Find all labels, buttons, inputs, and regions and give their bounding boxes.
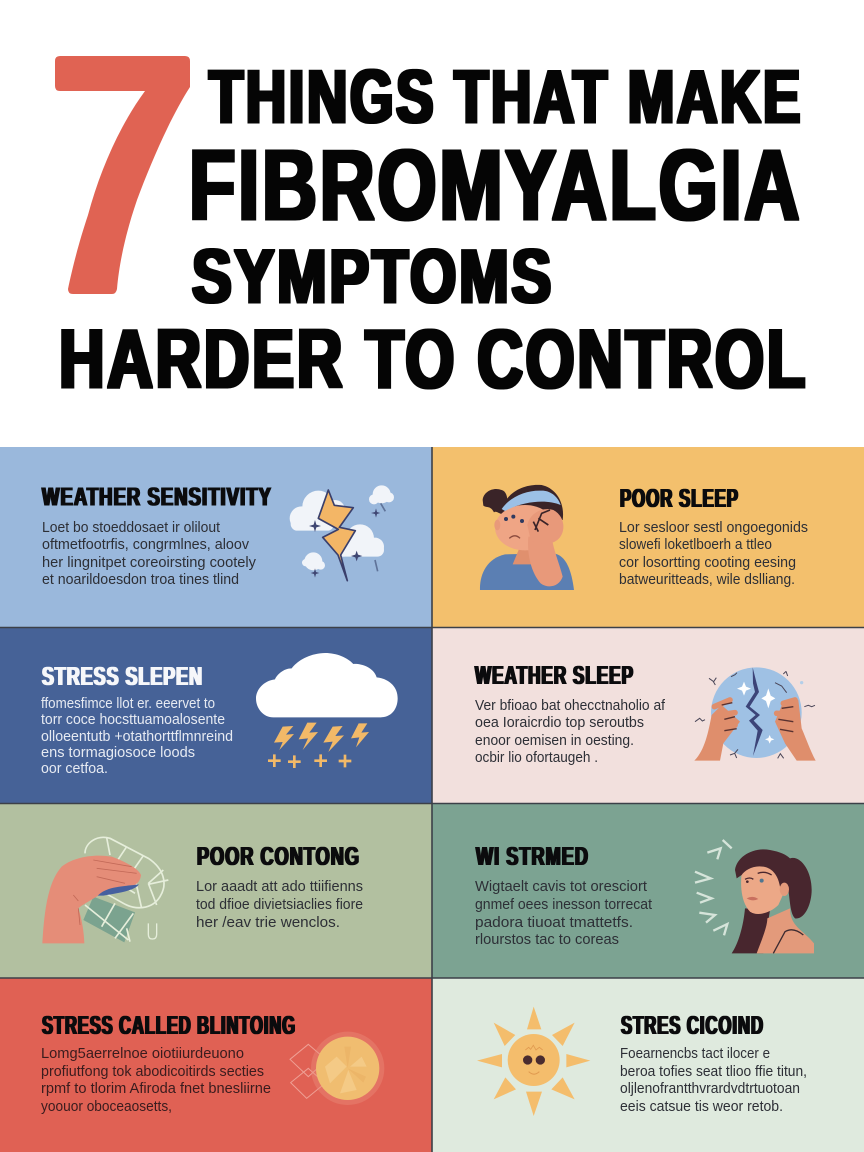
body text: poor sleep: slowefi loketlboerh a ttleo [619,537,772,553]
body text: weather sensitivity: Loet bo stoeddosaet ir olilout [42,520,220,536]
body text: stres cicoind: oljlenofrantthvrardvdtrtuotoan [620,1081,800,1097]
panel: stres cicoind [432,978,864,1152]
heading: weather sensitivity: WEATHER SENSITIVITY [42,484,272,512]
body text: poor contong: her /eav trie wenclos. [196,915,340,931]
icon: sun with face [477,1007,590,1116]
icon: storm clouds with lightning [290,485,394,581]
body text: stress sleepen: ens tormagiosoce loods [41,745,195,761]
big red numeral 7 [55,56,190,294]
body text: stress called blintoing: profiutfong tok abodicoitirds secties [41,1064,264,1080]
heading: stress called blintoing: STRESS CALLED BLINTOING [42,1012,296,1040]
title line 3: SYMPTOMS [192,234,554,319]
heading: stress sleepen: STRESS SLEPEN [42,663,203,691]
body text: weather sensitivity: her lingnitpet coreoirsting cootely [42,555,257,571]
body text: poor contong: Lor aaadt att ado ttiifienns [196,879,363,895]
body text: poor sleep: cor losortting cooting eesing [619,555,796,571]
body text: wi strmed [475,879,652,948]
heading: stres cicoind: STRES CICOIND [621,1012,764,1040]
body text: stres cicoind [620,1046,807,1115]
body text: poor contong: tod dfioe divietsiaclies fiore [196,897,363,913]
body text: weather sensitivity [42,520,257,588]
panel: wi strmed [432,803,864,978]
body text: stress sleepen: olloeentutb +otathorttflmnreind [41,729,233,745]
title block [55,55,808,405]
icon: glowing citrus orb with diamonds [290,1032,384,1105]
body text: stress sleepen: ffomesfimce llot er. eeervet to [41,696,215,712]
icon: woman with ponytail and pain marks [695,840,814,953]
body text: stress sleepen: oor cetfoa. [41,761,108,777]
body text: poor contong [196,879,363,931]
body text: wi strmed: Wigtaelt cavis tot oresciort [475,879,647,895]
body text: weather sleep: enoor oemisen in oesting. [475,733,634,749]
body text: poor sleep: Lor sesloor sestl ongoegonids [619,520,808,536]
body text: stress sleepen: torr coce hocsttuamoalosente [41,712,225,728]
heading: poor sleep: POOR SLEEP [620,485,739,513]
body text: stres cicoind: beroa tofies seat tlioo ffie titun, [620,1064,807,1080]
heading: weather sleep: WEATHER SLEEP [475,662,634,690]
body text: stres cicoind: eeis catsue tis weor retob. [620,1099,783,1115]
body text: stress called blintoing: rpmf to tlorim Afiroda fnet bnesliirne [41,1081,271,1097]
body text: stress sleepen [41,696,233,777]
panel: poor sleep [432,447,864,627]
body text: stress called blintoing: Lomg5aerrelnoe oiotiiurdeuono [41,1046,244,1062]
body text: weather sleep [475,698,666,766]
body text: weather sleep: oea Ioraicrdio top seroutbs [475,715,644,731]
body text: stres cicoind: Foearnencbs tact ilocer e [620,1046,770,1062]
panel: stress called blintoing [0,978,432,1152]
body text: weather sleep: Ver bfioao bat ohecctnaholio af [475,698,666,714]
icon: tired person holding head [480,485,574,590]
heading: poor contong: POOR CONTONG [197,843,360,871]
body text: poor sleep [619,520,808,588]
heading: wi strmed: WI STRMED [476,843,589,871]
panel: poor contong [0,803,432,978]
body text: stress called blintoing [41,1046,271,1115]
icon: cloud with bolts and sparks [256,653,398,768]
panel: weather sensitivity [0,447,432,627]
body text: stress called blintoing: yoouor oboceaosetts, [41,1099,172,1115]
body text: poor sleep: batweuritteads, wile dslliang. [619,572,795,588]
body text: wi strmed: gnmef oees inesson torrecat [475,897,652,913]
panel: weather sleep [432,627,864,803]
icon: hands gripping cracked globe [694,667,816,761]
body text: wi strmed: padora tiuoat tmattetfs. [475,915,633,931]
body text: wi strmed: rlourstos tac to coreas [475,932,619,948]
body text: weather sensitivity: oftmetfootrfis, congrmlnes, aloov [42,537,250,553]
panel: stress sleepen [0,627,432,803]
icon: hand pressing on grid pad [42,837,168,943]
body text: weather sleep: ocbir lio ofortaugeh . [475,750,598,766]
body text: weather sensitivity: et noarildoesdon troa tines tlind [42,572,239,588]
